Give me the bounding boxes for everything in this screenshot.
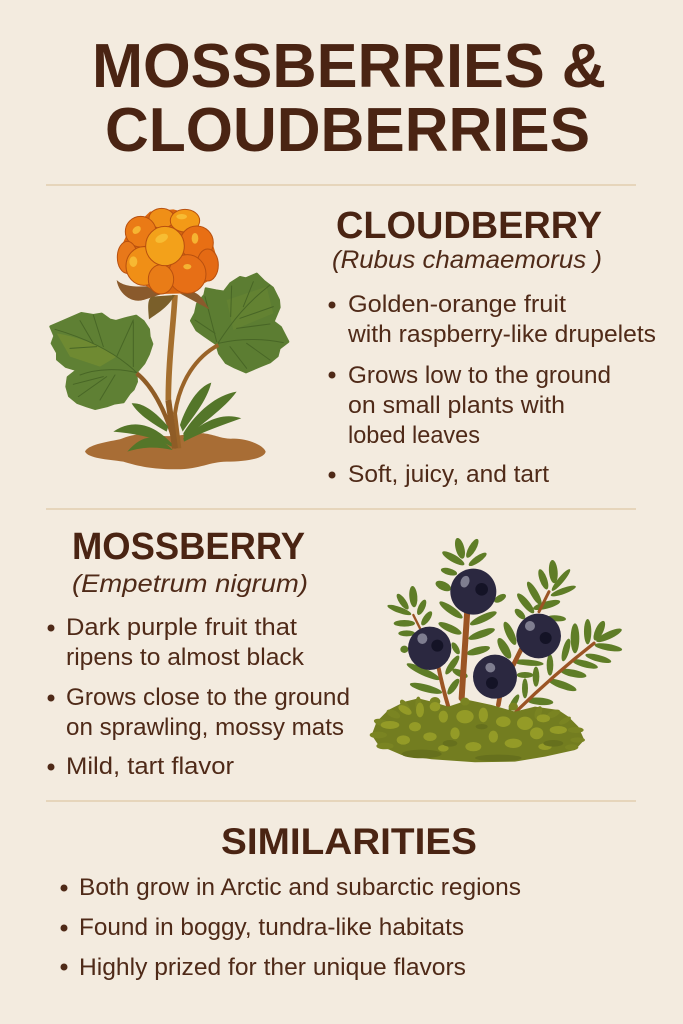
illustration: cloudberry plant <box>51 208 288 469</box>
list: mossberry facts: ripens to almost black <box>66 644 305 671</box>
left leaf <box>51 313 152 409</box>
soil mound <box>85 433 266 469</box>
list: similarities: Found in boggy, tundra-like habitats <box>79 914 464 941</box>
list: similarities: Both grow in Arctic and subarctic regions <box>79 874 521 901</box>
grass blades <box>113 383 241 452</box>
list: mossberry facts: on sprawling, mossy mats <box>66 714 344 741</box>
stems <box>413 592 594 712</box>
list: cloudberry facts: Grows low to the ground <box>348 362 611 389</box>
berries <box>408 569 561 699</box>
list: mossberry facts: Grows close to the ground <box>66 684 350 711</box>
right leaf <box>191 274 288 372</box>
panel: cloudberry <box>51 205 656 488</box>
heading: similarities: SIMILARITIES <box>221 821 477 862</box>
title <box>92 32 606 165</box>
panel: similarities <box>60 821 521 981</box>
list: cloudberry facts: Golden-orange fruit <box>348 291 566 318</box>
title: MOSSBERRIES & <box>92 32 606 101</box>
stems <box>168 295 175 400</box>
list: mossberry facts: Dark purple fruit that <box>66 614 297 641</box>
moss mound <box>370 697 585 762</box>
list: similarities: Highly prized for ther unique flavors <box>79 954 466 981</box>
berry <box>117 208 218 294</box>
list: mossberry facts <box>48 614 350 780</box>
list: cloudberry facts: Soft, juicy, and tart <box>348 461 549 488</box>
illustration: mossberry plant <box>370 537 623 762</box>
latin name: mossberry: (Empetrum nigrum) <box>72 570 308 598</box>
list: cloudberry facts: lobed leaves <box>348 422 480 449</box>
heading: cloudberry: CLOUDBERRY <box>336 205 602 247</box>
sepals <box>117 280 209 319</box>
list: cloudberry facts: with raspberry-like drupelets <box>347 321 656 348</box>
title: CLOUDBERRIES <box>105 96 590 165</box>
needles <box>386 537 623 712</box>
list: similarities <box>60 874 521 981</box>
heading: mossberry: MOSSBERRY <box>72 526 305 568</box>
list: cloudberry facts: on small plants with <box>348 392 565 419</box>
list: cloudberry facts <box>328 291 656 488</box>
latin name: cloudberry: (Rubus chamaemorus ) <box>332 246 602 274</box>
list: mossberry facts: Mild, tart flavor <box>66 753 234 780</box>
panel: mossberry <box>48 526 623 780</box>
moss fringe <box>370 697 585 750</box>
